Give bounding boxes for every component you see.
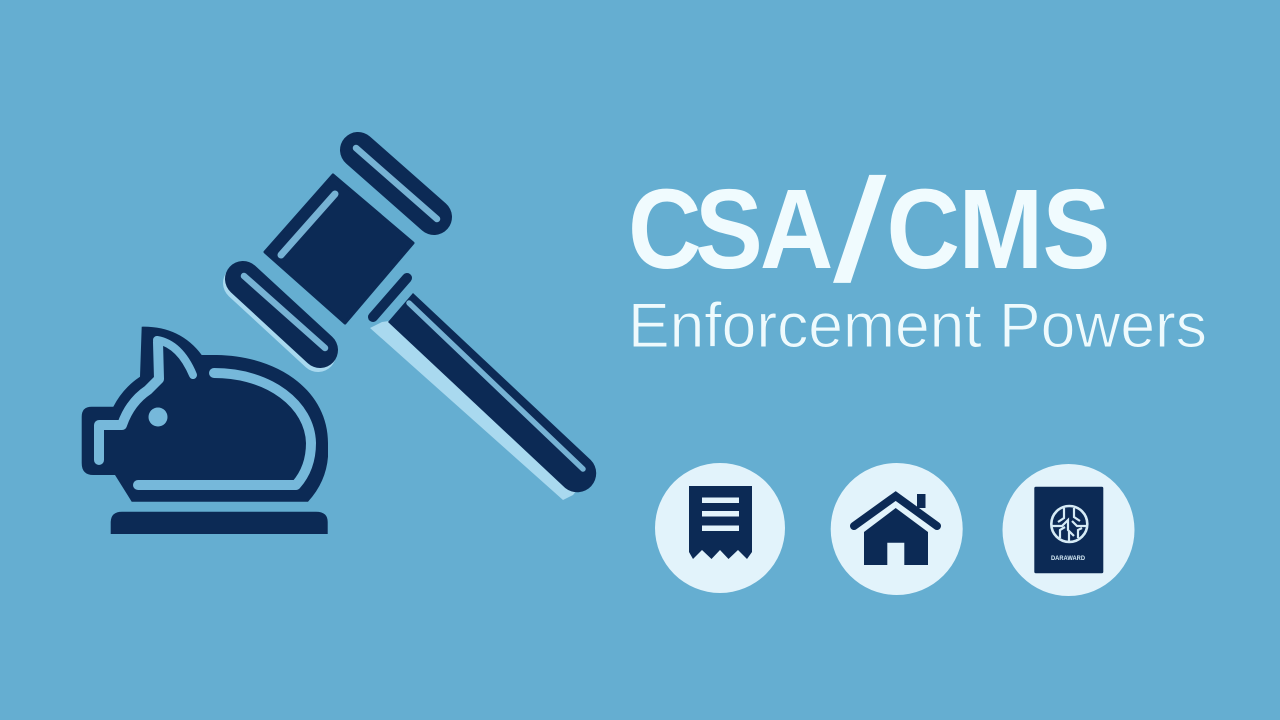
gavel lower cap highlight [241, 283, 318, 354]
gavel top cap [358, 150, 434, 217]
pig eye [148, 408, 168, 426]
house badge circle [831, 463, 963, 595]
pig face stripe [99, 342, 159, 460]
emblem pattern [1052, 508, 1086, 541]
house body [864, 508, 928, 565]
gavel lower cap [243, 279, 320, 350]
subtitle: Enforcement Powers [628, 291, 1207, 361]
pig base [111, 512, 328, 534]
passport badge circle [1002, 464, 1134, 596]
title: CMS [886, 166, 1110, 292]
icon: piggy bank [82, 327, 328, 534]
passport label: DARAWARD [1051, 555, 1085, 562]
icon: house [831, 463, 963, 595]
pig back stripe [138, 373, 311, 485]
passport emblem [1051, 506, 1087, 542]
gavel lower cap inner stripe [244, 276, 325, 348]
gavel top cap inner stripe [356, 148, 437, 219]
icon: receipt [655, 463, 785, 593]
icon: gavel [241, 148, 596, 500]
receipt paper [689, 486, 752, 559]
gavel head inner stripe [281, 194, 335, 255]
receipt lines [702, 498, 739, 531]
pig body [82, 327, 328, 502]
icon: passport [1002, 464, 1134, 596]
gavel handle [388, 293, 596, 492]
pig ear stripe [157, 340, 193, 375]
passport cover [1034, 487, 1103, 573]
house chimney [917, 494, 926, 508]
title: CSA [628, 166, 833, 292]
gavel collar [373, 278, 407, 317]
emblem ring [1051, 506, 1087, 542]
house roof [854, 496, 937, 526]
title [628, 150, 1110, 312]
gavel handle highlight [370, 320, 585, 500]
gavel head block [265, 175, 413, 323]
title: / [828, 150, 891, 312]
receipt badge circle [655, 463, 785, 593]
pig ear inner [165, 349, 186, 378]
gavel handle inner stripe [409, 303, 583, 469]
